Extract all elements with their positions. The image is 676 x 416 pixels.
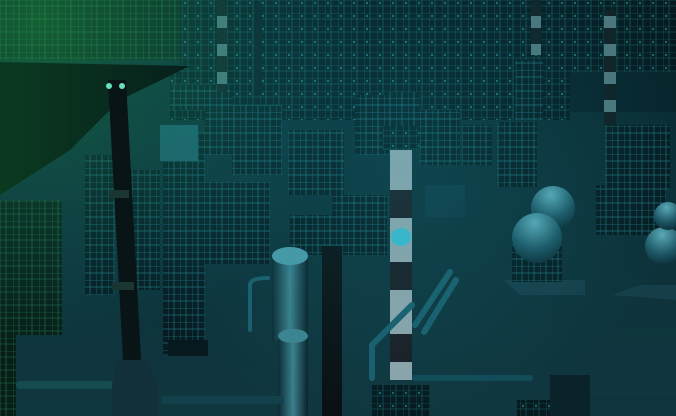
dark stack left (106, 80, 158, 416)
black chimney (322, 246, 342, 416)
striped far stacks (217, 0, 616, 125)
pipe racks (20, 272, 530, 400)
main left tower (160, 125, 208, 356)
far field of units (0, 0, 676, 120)
lower right machinery (517, 375, 676, 416)
striped main stack (372, 126, 430, 416)
dark yard upper left (0, 62, 190, 195)
mid units (170, 60, 670, 264)
centre columns (272, 247, 308, 416)
left units (0, 155, 160, 416)
spherical tanks (503, 186, 676, 300)
